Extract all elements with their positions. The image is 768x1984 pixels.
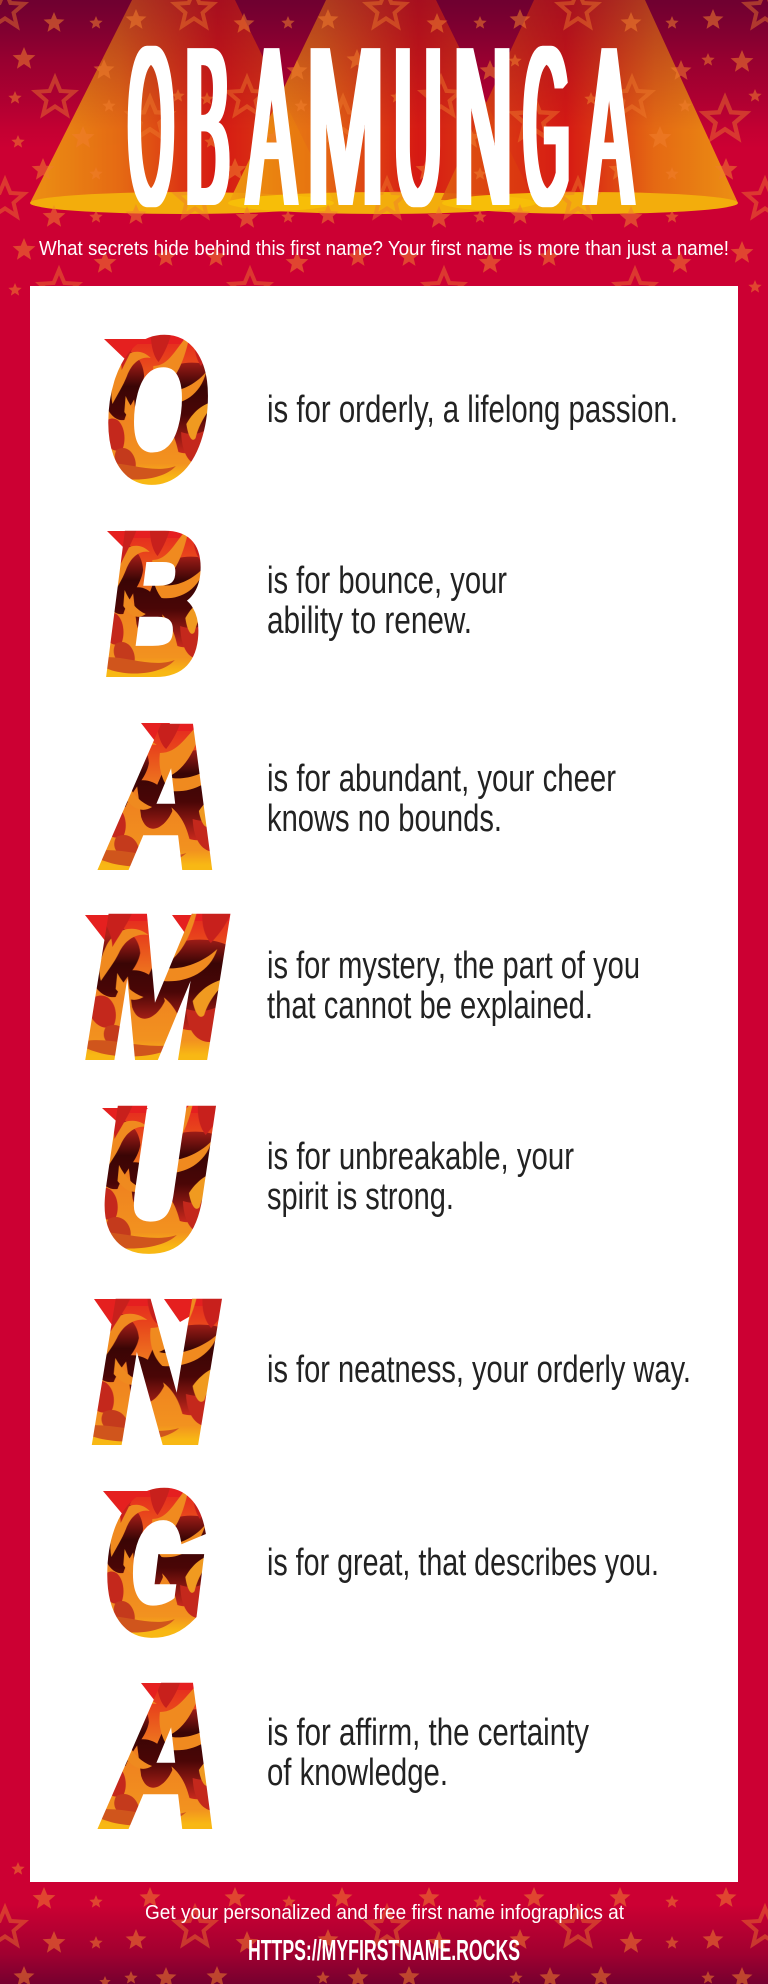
row: G [103,1452,659,1673]
row: O [104,299,678,520]
spotlight top shade [0,0,768,130]
footer url: HTTPS://MYFIRSTNAME.ROCKS [248,1935,520,1967]
spotlight centre [228,0,536,214]
subtitle: What secrets hide behind this first name? Your first name is more than just a name! [39,238,729,260]
text A: of knowledge. [267,1752,448,1794]
flame letter M: M [87,877,225,1098]
spotlight right [441,0,738,214]
flame letter A: A [104,1644,219,1866]
text B [267,560,507,642]
star pattern: bottom [0,1862,768,1984]
text A [267,758,616,840]
row: A [104,685,616,907]
text U [267,1136,574,1218]
row: M [85,877,640,1098]
text M: is for mystery, the part of you [267,945,640,987]
text B: is for bounce, your [267,560,507,602]
spotlight left [30,0,334,214]
text A [267,1712,589,1794]
row: B [107,493,507,714]
row: A (second) [104,1644,589,1866]
text U: is for unbreakable, your [267,1136,574,1178]
footer tagline: Get your personalized and free first name infographics at [145,1902,624,1924]
title [129,0,632,254]
text A: is for abundant, your cheer [267,758,616,800]
text A: is for affirm, the certainty [267,1712,589,1754]
flame letter A: A [104,685,219,907]
title: N [454,0,512,254]
title: B [186,0,229,254]
title: M [307,0,384,254]
title: G [524,0,569,254]
flame letter B: B [108,493,202,714]
text M [267,945,640,1027]
text U: spirit is strong. [267,1176,454,1218]
title: A [248,0,295,254]
spotlights [0,0,768,214]
flame letter O: O [105,299,207,520]
title: U [395,0,441,254]
text A: knows no bounds. [267,798,502,840]
text M: that cannot be explained. [267,985,593,1027]
text B: ability to renew. [267,600,472,642]
star pattern: top [0,0,768,306]
flame letter U: U [100,1069,212,1290]
flame letter N: N [94,1260,218,1482]
white panel [30,286,738,1882]
title: O [129,0,173,254]
row: N [94,1260,691,1482]
row: U [100,1069,574,1290]
flame letter G: G [104,1452,206,1673]
text: A [586,0,632,254]
